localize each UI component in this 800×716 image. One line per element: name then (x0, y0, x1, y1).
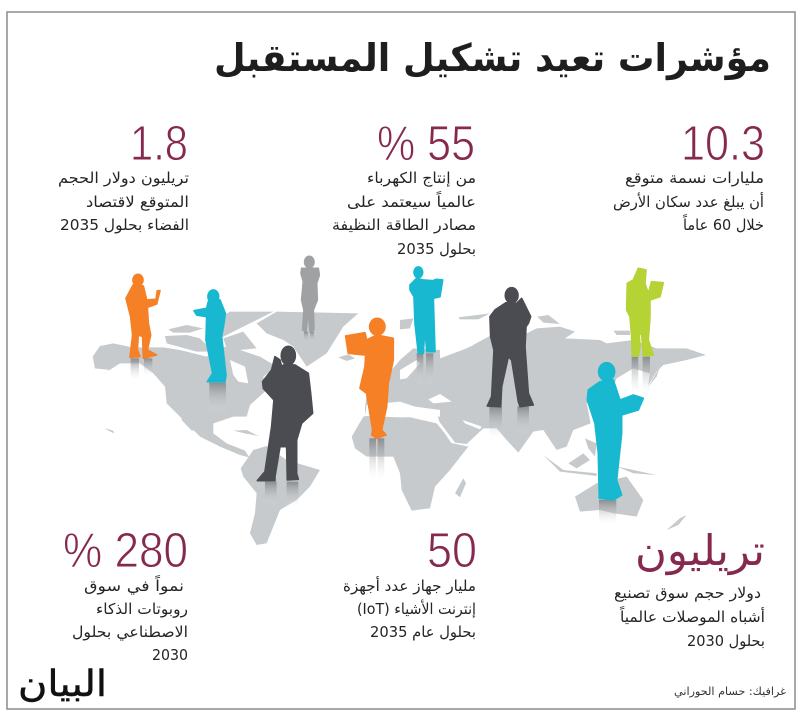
stat: semiconductors: بحلول 2030 (687, 632, 765, 650)
stat: space economy: تريليون دولار الحجم (58, 169, 189, 187)
figure: dark man on phone, right (487, 288, 533, 407)
stat: population: خلال 60 عاماً (682, 214, 764, 234)
stat: space economy: الفضاء بحلول 2035 (60, 216, 189, 234)
stat: internet of things: 50 (427, 524, 477, 578)
stat: space economy (58, 117, 189, 234)
stat: clean energy: بحلول 2035 (397, 240, 476, 258)
figure: cyan man in foreground (587, 363, 643, 500)
figure: cyan man with tablet (410, 267, 443, 353)
stat: robotics: روبوتات الذكاء (96, 600, 188, 618)
stat: population: 10.3 (681, 117, 765, 171)
stat: semiconductors: دولار حجم سوق تصنيع (614, 584, 761, 602)
stat: internet of things: إنترنت الأشياء (IoT) (357, 599, 476, 618)
stat: space economy: 1.8 (130, 117, 188, 171)
stat: semiconductors (614, 526, 765, 650)
stat: internet of things: مليار جهاز عدد أجهزة (343, 576, 476, 595)
stat: semiconductors: أشباه الموصلات عالمياً (619, 606, 765, 626)
stat: robotics: % 280 (63, 524, 188, 578)
stat: population (613, 117, 765, 234)
stat: semiconductors: تريليون (635, 526, 765, 575)
stat: space economy: المتوقع لاقتصاد (86, 193, 189, 211)
stat: robotics (63, 524, 188, 664)
stat: robotics: 2030 (152, 646, 188, 664)
stat: population: أن يبلغ عدد سكان الأرض (613, 192, 764, 211)
stat: internet of things: بحلول عام 2035 (370, 623, 476, 641)
graphic credit: غرافيك: حسام الحوراني (674, 685, 786, 698)
figure: lime woman with tablet (627, 268, 663, 356)
stat: robotics: نمواً في سوق (84, 575, 184, 596)
reflections under the figures (131, 332, 650, 524)
figure: grey woman (301, 256, 319, 332)
stat: clean energy: مصادر الطاقة النظيفة (332, 216, 476, 234)
logo: Al Bayan: البيان (18, 664, 107, 705)
stat: clean energy: من إنتاج الكهرباء (367, 169, 476, 188)
figure: orange woman with tablet (346, 318, 393, 438)
world map (93, 312, 706, 545)
americas (93, 312, 358, 545)
figure: cyan woman with tablet (194, 290, 226, 382)
figure: orange man with tablet (126, 274, 160, 358)
stat: robotics: الاصطناعي بحلول (72, 623, 188, 642)
title: مؤشرات تعيد تشكيل المستقبل (214, 36, 771, 80)
stat: clean energy: عالمياً سيعتمد على (347, 191, 476, 211)
stat: clean energy (332, 117, 476, 258)
old world (352, 313, 706, 530)
figure: dark man on phone, left (257, 346, 313, 481)
stat: population: مليارات نسمة متوقع (625, 169, 764, 187)
stat: clean energy: % 55 (377, 117, 475, 171)
stat: internet of things (343, 524, 477, 641)
